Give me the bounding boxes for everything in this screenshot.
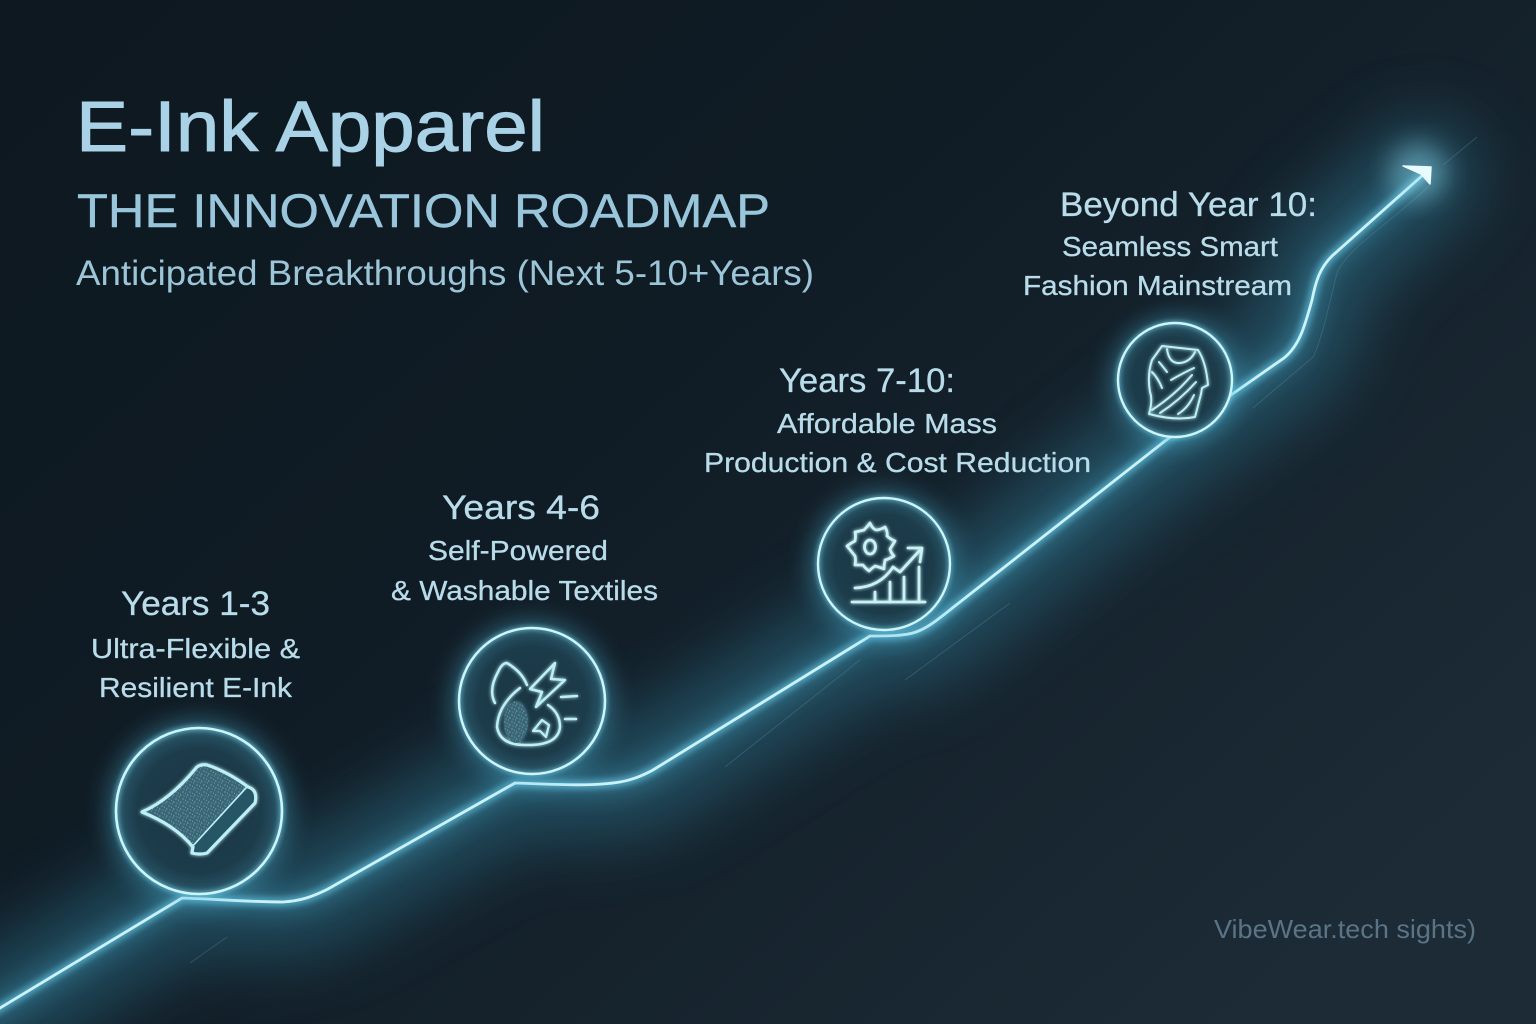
milestone 3 badge [810,490,958,638]
milestone 2 badge [451,620,613,782]
source note: VibeWear.tech sights) [1214,914,1476,944]
milestone 3 text [704,362,1091,478]
icon: smart shirt [1149,346,1208,418]
milestone 4 text: Seamless Smart [1062,231,1278,262]
milestone 1 badge [107,719,291,903]
milestone 4: beyond year 10 [1023,186,1317,444]
icon: drops and lightning bolt [492,663,577,745]
milestone 2 text: Years 4-6 [442,489,600,527]
milestone 1 text: Years 1-3 [121,585,270,623]
route ambient glow [0,174,1424,1014]
milestone 1 text: Ultra-Flexible & [91,633,300,664]
milestone 4 text: Beyond Year 10: [1060,186,1317,224]
milestone 3 text: Affordable Mass [777,408,997,439]
milestone 3 text: Years 7-10: [779,362,955,400]
milestone 1 text [91,585,300,703]
subtitle: THE INNOVATION ROADMAP [77,184,770,237]
icon: flexible sheet [142,765,256,854]
milestone 3 text: Production & Cost Reduction [704,447,1091,478]
milestone 3: years 7-10 [704,362,1091,638]
faint secondary lines [190,137,1477,963]
milestone 4 text [1023,186,1317,301]
milestone 2: years 4-6 [391,489,658,782]
icon: gear and growth chart [847,523,925,602]
milestone 2 text: Self-Powered [428,535,608,566]
milestone 4 text: Fashion Mainstream [1023,270,1292,301]
arrow head [1388,142,1448,202]
milestone 4 badge [1111,316,1239,444]
milestone 2 text [391,489,658,606]
title: E-Ink Apparel [76,88,545,167]
glowing roadmap line [0,174,1424,1014]
milestone 2 text: & Washable Textiles [391,575,658,606]
milestone 1 text: Resilient E-Ink [99,672,293,703]
milestone 1: years 1-3 [91,585,300,903]
tagline: Anticipated Breakthroughs (Next 5-10+Years) [76,254,814,293]
